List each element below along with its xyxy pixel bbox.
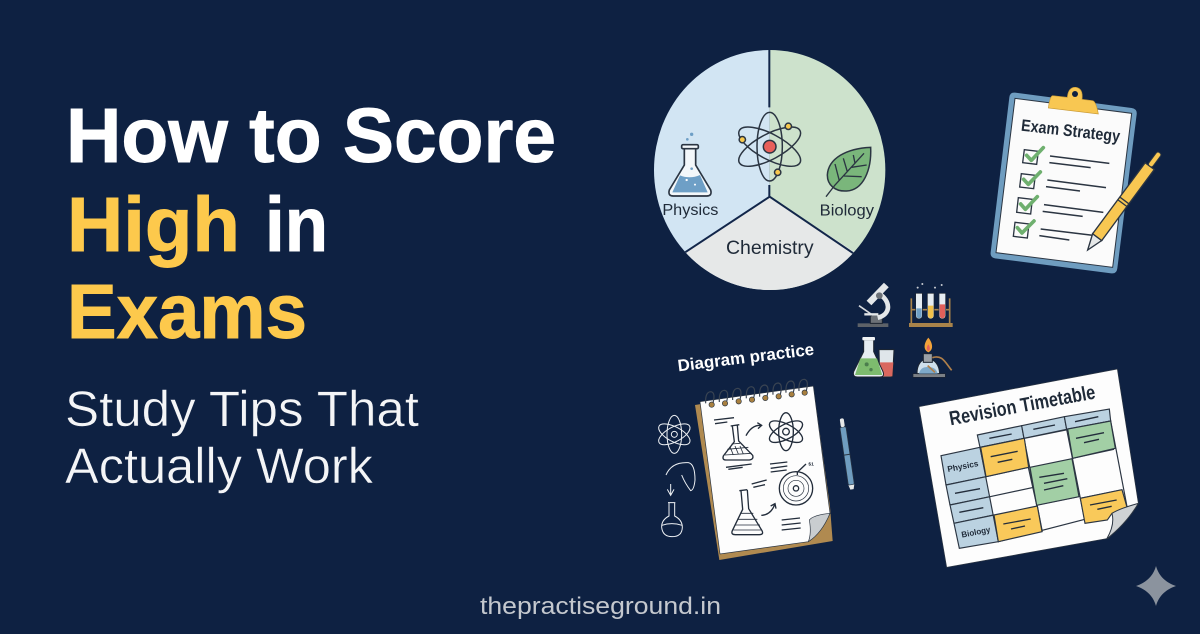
checklist [1013, 148, 1109, 240]
icon group: lab equipment [853, 283, 953, 377]
panel: exam strategy clipboard [991, 87, 1164, 273]
column headers [977, 409, 1111, 447]
subtitle: Study Tips That [65, 381, 419, 437]
coloured cells [981, 438, 1029, 477]
notebook page [700, 386, 830, 554]
icon: bunsen burner [913, 338, 952, 377]
icon: atom [733, 112, 806, 181]
clipboard heading: Exam Strategy [1020, 116, 1122, 146]
title: High [67, 182, 240, 268]
row label: Physics: Physics [946, 458, 979, 474]
row label: Biology: Biology [960, 524, 992, 540]
white cells [980, 421, 1127, 542]
timetable heading: Revision Timetable [948, 382, 1097, 430]
table grid [941, 409, 1127, 548]
icon: pen [839, 418, 855, 490]
notebook cover [695, 386, 833, 560]
page curl [1107, 503, 1138, 539]
page curl [808, 513, 830, 542]
icon: microscope [858, 285, 888, 327]
label: Chemistry: Chemistry [726, 238, 814, 259]
row headers [941, 447, 998, 548]
icon: sparkle [1136, 566, 1176, 606]
title [66, 93, 556, 355]
panel: subjects pie chart [654, 50, 886, 290]
clipboard board [991, 93, 1137, 273]
website footer: thepractiseground.in [480, 593, 721, 620]
icon: leaf [826, 147, 871, 197]
title: Exams [67, 269, 307, 355]
title: in [265, 182, 328, 268]
timetable page [919, 369, 1138, 567]
icon: beakers [853, 337, 894, 377]
panel: diagram practice notebook [656, 340, 855, 560]
title: How to Score [66, 93, 556, 179]
notebook heading: Diagram practice [677, 340, 815, 375]
side sketches [656, 415, 695, 537]
clip [1048, 87, 1098, 114]
panel: revision timetable [919, 369, 1138, 567]
spiral binding [706, 379, 807, 407]
icon: flask [669, 133, 711, 196]
panel: diagram practice notebook: $1 [808, 462, 814, 468]
page diagrams [714, 413, 813, 535]
cell dashes [955, 417, 1117, 529]
label: Physics: Physics [662, 202, 719, 219]
icon: test tube rack [909, 283, 953, 327]
subtitle: Actually Work [65, 438, 374, 494]
icon: pencil [1083, 149, 1164, 253]
label: Biology: Biology [820, 203, 874, 220]
subtitle [65, 381, 419, 494]
